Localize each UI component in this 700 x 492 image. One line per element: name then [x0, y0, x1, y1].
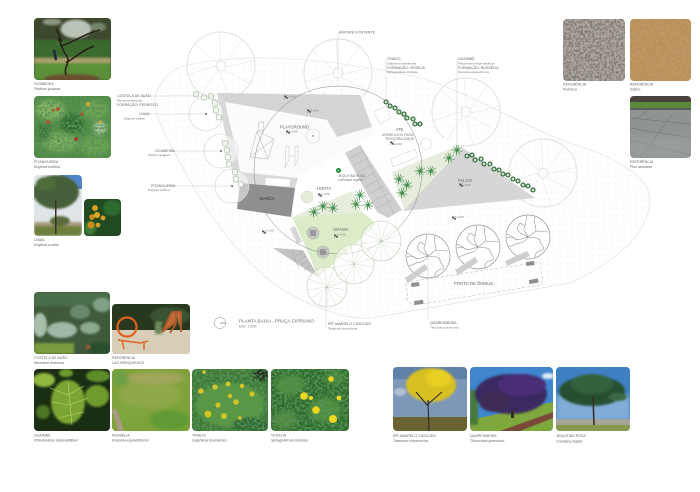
- horta shrub: [301, 191, 313, 203]
- horta label: HORTA: [317, 186, 331, 191]
- photo: referencia lao brinquedos: [112, 304, 190, 354]
- callout: costela de adao: COSTELA DE ADÃO: [117, 93, 151, 98]
- horta planting hatch: [292, 191, 362, 217]
- caption: uvaia: Eugenia uvalha: [34, 243, 59, 247]
- photo: ipe: [393, 367, 467, 431]
- caption: quaresmeira: Tibouchina granulosa: [470, 439, 504, 443]
- callout: guaimbe: Philodendron bipinnatifidum: [458, 62, 496, 66]
- caption: costela de adao: [34, 355, 68, 365]
- caption: lao brinquedos: LAO BRINQUEDOS: [112, 361, 145, 365]
- caption: trialis: TRIÁLIS: [192, 434, 206, 438]
- callout: costela de adao: Monstera deliciosa: [117, 98, 142, 102]
- caption: ipe: [393, 433, 436, 443]
- callout: goiabeira: Psidium guajava: [148, 153, 170, 157]
- lawn planters: [307, 227, 329, 258]
- left paving strip: [217, 93, 243, 180]
- photo: russelia: [112, 369, 190, 431]
- north and title: [214, 317, 314, 329]
- caption: uvaia: [34, 238, 59, 247]
- stairs: [345, 145, 402, 218]
- photo: costela de adao: [33, 292, 114, 354]
- caption: ipe: Tabebuia chrysotricha: [393, 439, 428, 443]
- main circle: [254, 86, 422, 254]
- existing trees canopy: [187, 32, 577, 207]
- callout: trialis: TRIÁLIS: [387, 57, 401, 61]
- caption: jequitiba: JEQUITIBÁ ROSA: [556, 434, 586, 438]
- jequitiba marker: Cariniana legalis: [338, 178, 363, 182]
- caption: vedelia: Sphagneticola trilobata: [271, 438, 308, 442]
- caption: pedrisca: REFERÊNCIA: [563, 82, 587, 86]
- ati label: [382, 127, 415, 141]
- level markers: +0,00: [463, 183, 471, 187]
- caption: costela de adao: COSTELA DE ADÃO: [34, 355, 68, 360]
- photo: quaresmeira: [470, 367, 554, 431]
- callout: guaimbe: Russelia equisetiformis: [458, 70, 489, 74]
- grey triangle: [273, 248, 319, 278]
- grama lawn: [292, 212, 377, 277]
- callout: trialis: Galphimia brasiliensis: [387, 62, 417, 66]
- caption: goiabeira: Psidium guajava: [34, 87, 60, 91]
- hedge rings top: [384, 100, 422, 126]
- callout: ipe: Tabebuia chrysotricha: [328, 326, 358, 330]
- plan title: ESC. 1:500: [239, 324, 256, 328]
- callout: pitangueira: Eugenia uniflora: [148, 188, 170, 192]
- callout: quaresmeira: QUARESMEIRA: [430, 321, 457, 325]
- callout: ipe: IPÊ AMARELO CASCUDO: [328, 321, 371, 326]
- caption: guaimbe: GUAIMBÉ: [34, 432, 51, 438]
- grey paving band: [217, 93, 372, 137]
- callout: arvore existente: ÁRVORE EXISTENTE: [339, 30, 376, 34]
- callout: trialis: [387, 57, 426, 74]
- hedge rings palco: [465, 153, 535, 192]
- photo: uvaia fruit: [84, 199, 121, 236]
- playground area: [228, 103, 377, 178]
- caption: saibro: REFERÊNCIA: [630, 82, 654, 86]
- callout: costela de adao: FORRAÇÃO: PEDRISCO: [117, 102, 158, 107]
- grama lawn: GRAMA: [333, 227, 349, 232]
- caption: lao brinquedos: REFERÊNCIA: [112, 355, 136, 360]
- bus stop: PONTO DE ÔNIBUS: [454, 281, 493, 286]
- label: playground: PLAYGROUND: [280, 124, 309, 130]
- ati label: TERCEIRA IDADE: [385, 137, 415, 141]
- horta white area: [292, 155, 358, 217]
- ipe trees: [307, 221, 401, 307]
- palco: PALCO: [458, 178, 473, 183]
- caption: trialis: [192, 434, 227, 442]
- caption: guaimbe: [34, 432, 78, 442]
- palms: [308, 144, 462, 218]
- ati label: APARELHOS PARA: [382, 133, 414, 137]
- caption: pitangueira: [34, 160, 60, 169]
- caption: saibro: [630, 82, 654, 92]
- caption: goiabeira: GOIABEIRA: [34, 82, 54, 86]
- ATI white area: [360, 95, 463, 172]
- planting bed hatch right: [392, 147, 463, 212]
- caption: trialis: Galphimia brasiliensis: [192, 438, 227, 442]
- caption: vedelia: VEDÉLIA: [271, 432, 287, 438]
- callout: goiabeira: GOIABEIRA: [155, 149, 175, 153]
- level markers: +0,00: [288, 94, 296, 98]
- caption: russelia: Russelia equisetiformis: [112, 438, 149, 442]
- callout: guaimbe: [458, 56, 499, 74]
- caption: jequitiba: [556, 434, 586, 444]
- caption: piso: [630, 159, 654, 169]
- jequitiba marker: JEQUITIBÁ ROSA: [338, 174, 366, 178]
- photo: jequitiba: [556, 367, 630, 431]
- callout: pitangueira: [148, 184, 176, 192]
- caption: quaresmeira: QUARESMEIRA: [470, 434, 497, 438]
- site outline with grid: [155, 58, 650, 318]
- left trees with bushes: [189, 91, 249, 203]
- caption: russelia: [112, 432, 149, 442]
- quaresmeira trees: [405, 215, 550, 283]
- callout: ipe: [328, 321, 371, 330]
- caption: saibro: Saibro: [630, 88, 640, 92]
- photo: vedelia: [271, 369, 349, 431]
- bus stop: [406, 261, 543, 305]
- level markers: +0,00: [266, 228, 274, 232]
- callout: quaresmeira: [430, 321, 459, 330]
- callout: costela de adao: [117, 93, 158, 107]
- banca: BANCA: [260, 196, 275, 201]
- caption: ipe: IPÊ AMARELO CASCUDO: [393, 433, 436, 438]
- caption: jequitiba: Cariniana legalis: [556, 440, 583, 444]
- callout: trialis: FORMAÇÃO: VEDÉLIA: [387, 65, 426, 70]
- bench sliver: [290, 226, 302, 244]
- plan title: PLANTA BAIXA - PRAÇA CIPRIANO: [239, 318, 314, 324]
- caption: costela de adao: Monstera deliciosa: [34, 361, 64, 365]
- caption: pedrisca: Pedrisca: [563, 88, 577, 92]
- photo: pitangueira: [34, 96, 111, 158]
- icon: north: [214, 317, 226, 329]
- caption: uvaia: UVAIA: [34, 238, 45, 242]
- callout: uvaia: [124, 112, 150, 120]
- caption: guaimbe: Philodendron bipinnatifidum: [34, 438, 78, 442]
- level markers: +0,00: [322, 192, 330, 196]
- plan title: [239, 318, 314, 328]
- callout: pitangueira: PITANGUEIRA: [151, 184, 176, 188]
- callout: guaimbe: FORMAÇÃO: RUSSÉLIA: [458, 65, 499, 70]
- photo: trialis: [192, 369, 271, 433]
- ati label: ATE: [396, 127, 404, 132]
- callout: quaresmeira: Tibouchina granulosa: [430, 326, 459, 330]
- photo: guaimbe: [33, 369, 110, 431]
- photo: uvaia tree: [33, 175, 82, 236]
- photo: goiabeira: [34, 18, 111, 82]
- level markers: +0,00: [338, 232, 346, 236]
- callout lines: [146, 32, 457, 327]
- caption: pitangueira: Eugenia uniflora: [34, 165, 60, 169]
- callout: guaimbe: GUAIMBÉ: [458, 56, 475, 61]
- banca strip: [240, 172, 298, 188]
- caption: russelia: RUSSÉLIA: [112, 432, 130, 438]
- callout: goiabeira: [148, 149, 175, 157]
- photo: pedrisca: [563, 19, 625, 81]
- caption: vedelia: [271, 432, 308, 442]
- callout: uvaia: Eugenia uvalha: [124, 116, 145, 120]
- caption: goiabeira: [34, 82, 60, 91]
- jequitiba marker: [336, 168, 366, 182]
- caption: pedrisca: [563, 82, 587, 92]
- level markers: +0,00: [311, 108, 319, 112]
- caption: piso: Piso drenante: [630, 165, 652, 169]
- caption: piso: REFERÊNCIA: [630, 159, 654, 164]
- caption: pitangueira: PITANGUEIRA: [34, 160, 59, 164]
- caption: quaresmeira: [470, 434, 504, 443]
- photo: piso: [630, 96, 691, 158]
- level markers: +0,00: [456, 215, 464, 219]
- callout: uvaia: UVAIA: [139, 112, 150, 116]
- callout: trialis: Sphagneticola trilobata: [387, 70, 418, 74]
- level markers: +0,00: [290, 130, 298, 134]
- site plan: [155, 32, 650, 318]
- level markers: [262, 94, 471, 238]
- caption: lao brinquedos: [112, 355, 145, 365]
- palco: [403, 148, 535, 211]
- photo: saibro: [630, 19, 691, 81]
- level markers: +0,00: [394, 142, 402, 146]
- banca: [237, 183, 295, 217]
